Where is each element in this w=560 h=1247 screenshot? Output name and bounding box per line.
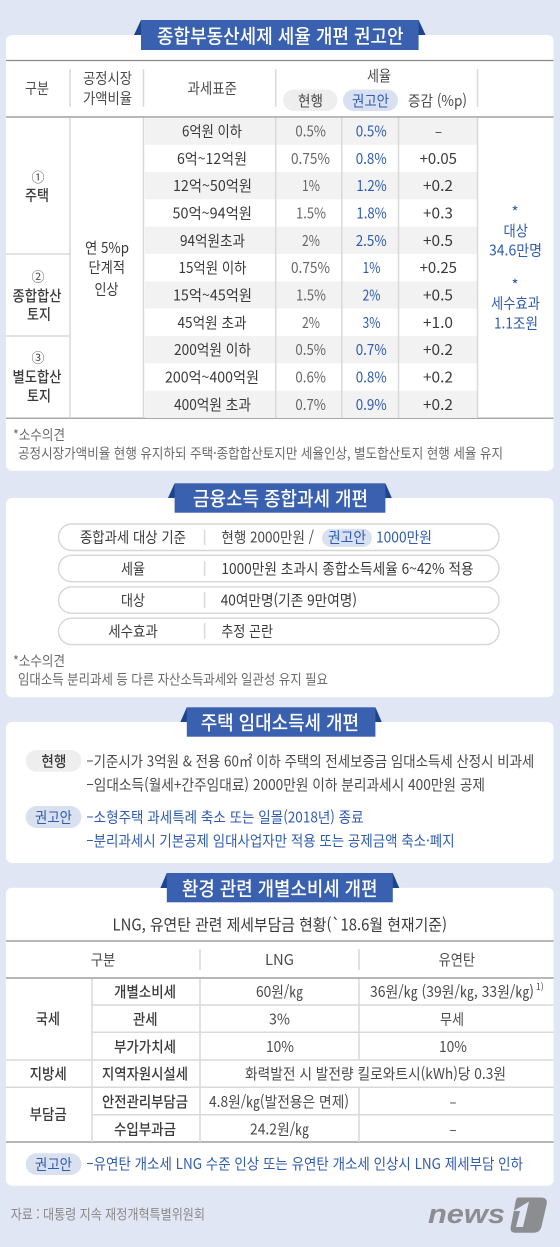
- row: up to 1.5 billion: 0.75%: [291, 257, 330, 278]
- row: over 40 billion: 0.9%: [356, 394, 387, 415]
- row: 20 to 40 billion: 0.8%: [356, 366, 387, 388]
- heading banner: rental income: 주택 임대소득세 개편: [201, 707, 359, 736]
- row: excise tax: [114, 980, 544, 1002]
- row: customs duty: 3%: [269, 1008, 290, 1030]
- category: housing: 주택: [25, 184, 49, 206]
- row: value added tax: 10%: [266, 1036, 294, 1057]
- row: up to 600 million: 0.5%: [356, 120, 387, 142]
- row: up to 1.5 billion: 1%: [362, 257, 381, 278]
- row: excise tax: 개별소비세: [114, 981, 176, 1002]
- category: aggregate land: ②: [32, 266, 45, 286]
- minority opinion note: [13, 425, 503, 463]
- row: import levy: –: [450, 1118, 456, 1140]
- row: tax threshold: 종합과세 대상 기준: [80, 526, 186, 548]
- row: over 9.4 billion: [180, 230, 453, 251]
- row: over 40 billion: +0.2: [423, 394, 453, 415]
- heading banner: financial income: 금융소득 종합과세 개편: [193, 482, 368, 512]
- row: over 9.4 billion: 94억원초과: [180, 230, 245, 251]
- row: up to 20 billion: 0.5%: [295, 339, 326, 360]
- row: value added tax: 10%: [439, 1036, 467, 1057]
- table header: 구분: [25, 78, 49, 98]
- current rules: –임대소득(월세+간주임대료) 2000만원 이하 분리과세시 400만원 공제: [86, 774, 485, 795]
- assessment ratio note: 인상: [94, 278, 119, 300]
- row: up to 20 billion: 0.7%: [356, 339, 387, 360]
- row: 20 to 40 billion: 0.6%: [295, 366, 326, 388]
- assessment ratio note: [85, 237, 129, 300]
- row: excise tax: 60원/㎏: [256, 981, 303, 1002]
- table header: 가액비율: [83, 88, 132, 108]
- row: local tax: [30, 1063, 506, 1084]
- minority opinion note: *소수의견: [13, 651, 65, 671]
- row: over 4.5 billion: 2%: [302, 312, 320, 333]
- row: value added tax: [114, 1036, 467, 1057]
- row: 600 million to 1.2 billion: 0.75%: [291, 148, 330, 169]
- panel: property tax rate reform: [6, 20, 554, 471]
- row: 1.5 to 4.5 billion: +0.5: [423, 284, 453, 306]
- group: national tax: 국세: [36, 1008, 60, 1029]
- row: up to 1.5 billion: 15억원 이하: [178, 257, 247, 278]
- row: up to 600 million: –: [435, 120, 442, 142]
- row: revenue effect: 세수효과: [108, 620, 158, 642]
- table header: 세율: [367, 65, 391, 86]
- row: tax threshold: 1000만원: [376, 526, 432, 548]
- row: 1.5 to 4.5 billion: 1.5%: [296, 284, 326, 306]
- callout: target and revenue effect: 1.1조원: [494, 312, 538, 334]
- current rules: [26, 750, 534, 795]
- recommendation: 권고안: [35, 1153, 72, 1174]
- row: rate: [58, 555, 499, 582]
- row: up to 20 billion: +0.2: [423, 339, 453, 360]
- recommended rules: –소형주택 과세특례 축소 또는 일몰(2018년) 종료: [86, 806, 364, 828]
- minority opinion note: 공정시장가액비율 현행 유지하되 주택·종합합산토지만 세율인상, 별도합산토지 현행 세율 유지: [18, 443, 503, 463]
- callout: target and revenue effect: [489, 202, 542, 334]
- category: aggregate land: 종합합산: [12, 285, 62, 306]
- row: target: [58, 587, 499, 613]
- row: 600 million to 1.2 billion: 0.8%: [356, 148, 387, 169]
- assessment ratio note: 단계적: [88, 256, 125, 278]
- row: customs duty: 관세: [133, 1008, 158, 1030]
- row: 5 to 9.4 billion: 1.8%: [356, 202, 387, 224]
- minority opinion note: 임대소득 분리과세 등 다른 자산소득과세와 일관성 유지 필요: [18, 669, 328, 689]
- callout: target and revenue effect: *: [512, 202, 519, 222]
- row: excise tax: 36원/㎏ (39원/㎏, 33원/㎏): [370, 981, 534, 1002]
- row: 1.2 to 5 billion: 1.2%: [356, 175, 387, 196]
- row: safety management levy: 안전관리부담금: [102, 1091, 188, 1112]
- row: over 4.5 billion: [178, 312, 453, 333]
- row: over 9.4 billion: 2.5%: [356, 230, 387, 251]
- category: separate land: ③: [32, 348, 45, 366]
- row: 600 million to 1.2 billion: +0.05: [420, 148, 457, 169]
- callout: target and revenue effect: *: [512, 274, 519, 296]
- row: excise tax: 1): [536, 980, 544, 993]
- row: 5 to 9.4 billion: [172, 202, 453, 224]
- group: levies: 부담금: [30, 1104, 67, 1124]
- table header: [25, 65, 467, 111]
- row: safety management levy: [102, 1091, 456, 1112]
- row: import levy: 24.2원/㎏: [250, 1118, 309, 1140]
- row: up to 1.5 billion: [178, 257, 457, 278]
- recommended rules: –분리과세시 기본공제 임대사업자만 적용 또는 공제금액 축소·폐지: [86, 830, 455, 851]
- row: 1.5 to 4.5 billion: 15억~45억원: [173, 284, 252, 306]
- row: target: 대상: [121, 590, 145, 610]
- current rules: 현행: [41, 750, 66, 772]
- row: rate: 1000만원 초과시 종합소득세율 6~42% 적용: [221, 558, 474, 579]
- row: tax threshold: [58, 524, 499, 550]
- row: safety management levy: –: [450, 1091, 456, 1112]
- table header: LNG: [265, 949, 294, 970]
- row: customs duty: [133, 1008, 464, 1030]
- table header: 유연탄: [439, 949, 475, 970]
- row: up to 600 million: [182, 120, 442, 142]
- row: local tax: 화력발전 시 발전량 킬로와트시(kWh)당 0.3원: [245, 1063, 506, 1084]
- row: up to 1.5 billion: +0.25: [420, 257, 457, 278]
- row: up to 20 billion: 200억원 이하: [174, 339, 251, 360]
- row: over 9.4 billion: 2%: [302, 230, 320, 251]
- row: import levy: 수입부과금: [114, 1118, 176, 1140]
- category: separate land: 토지: [27, 385, 51, 406]
- recommended rules: [26, 806, 455, 851]
- row: rate: 세율: [121, 558, 145, 579]
- row: over 40 billion: 400억원 초과: [174, 394, 251, 415]
- row: 1.5 to 4.5 billion: [173, 284, 453, 306]
- row: 20 to 40 billion: [165, 366, 453, 388]
- row: 20 to 40 billion: +0.2: [423, 366, 453, 388]
- recommendation: –유연탄 개소세 LNG 수준 인상 또는 유연탄 개소세 인상시 LNG 제세부담 인하: [86, 1153, 523, 1174]
- row: over 4.5 billion: +1.0: [423, 312, 453, 333]
- row: value added tax: 부가가치세: [114, 1036, 176, 1057]
- row: tax threshold: 권고안: [328, 526, 366, 548]
- row: safety management levy: 4.8원/㎏(발전용은 면제): [209, 1091, 349, 1112]
- category: housing: [25, 167, 49, 206]
- recommended rules: 권고안: [35, 806, 72, 828]
- row: 1.2 to 5 billion: +0.2: [423, 175, 453, 196]
- row: 5 to 9.4 billion: 1.5%: [296, 202, 326, 224]
- heading banner: excise tax: 환경 관련 개별소비세 개편: [182, 873, 378, 902]
- minority opinion note: *소수의견: [13, 425, 65, 445]
- row: up to 600 million: 6억원 이하: [182, 120, 242, 142]
- assessment ratio note: 연 5%p: [85, 237, 129, 258]
- table header: 구분: [91, 949, 116, 970]
- row: 600 million to 1.2 billion: [177, 148, 457, 169]
- logo: news1: [428, 1198, 547, 1233]
- row: tax threshold: 현행 2000만원 /: [221, 526, 314, 548]
- row: 1.2 to 5 billion: 1%: [302, 175, 320, 196]
- row: over 4.5 billion: 3%: [362, 312, 381, 333]
- row: over 9.4 billion: +0.5: [423, 230, 453, 251]
- row: import levy: [114, 1118, 456, 1140]
- row: over 40 billion: [174, 394, 453, 415]
- source: 자료 : 대통령 지속 재정개혁특별위원회: [11, 1204, 205, 1224]
- row: up to 600 million: 0.5%: [295, 120, 326, 142]
- table header: 증감 (%p): [408, 90, 467, 111]
- row: over 40 billion: 0.7%: [295, 394, 326, 415]
- row: 5 to 9.4 billion: 50억~94억원: [172, 202, 252, 224]
- row: 1.5 to 4.5 billion: 2%: [362, 284, 381, 306]
- row: 600 million to 1.2 billion: 6억~12억원: [177, 148, 247, 169]
- category: separate land: [12, 348, 62, 406]
- row: over 4.5 billion: 45억원 초과: [178, 312, 247, 333]
- row: local tax: 지역자원시설세: [102, 1063, 188, 1084]
- row: 5 to 9.4 billion: +0.3: [423, 202, 453, 224]
- table header: 권고안: [352, 90, 389, 111]
- table header: 과세표준: [188, 78, 237, 98]
- callout: target and revenue effect: 대상: [504, 220, 528, 241]
- minority opinion note: [13, 651, 328, 689]
- category: housing: ①: [32, 167, 45, 186]
- row: up to 20 billion: [174, 339, 453, 360]
- panel: financial income tax reform: [6, 482, 554, 697]
- row: revenue effect: 추정 곤란: [221, 620, 273, 642]
- table header: [91, 949, 475, 970]
- callout: target and revenue effect: 34.6만명: [489, 240, 542, 260]
- category: aggregate land: 토지: [27, 304, 51, 324]
- panel: environment-related excise tax reform: [6, 873, 554, 1186]
- logo: news1: news: [428, 1199, 505, 1229]
- callout: target and revenue effect: 세수효과: [491, 292, 540, 314]
- row: customs duty: 무세: [440, 1008, 464, 1030]
- category: aggregate land: [12, 266, 62, 324]
- row: target: 40여만명(기존 9만여명): [221, 590, 357, 610]
- row: 1.2 to 5 billion: 12억~50억원: [173, 175, 252, 196]
- table header: 현행: [298, 90, 323, 111]
- table subtitle: LNG, 유연탄 관련 제세부담금 현황(`18.6월 현재기준): [112, 911, 447, 935]
- row: 1.2 to 5 billion: [173, 175, 453, 196]
- panel: housing rental income tax reform: [6, 707, 554, 863]
- row: local tax: 지방세: [30, 1063, 67, 1084]
- row: 20 to 40 billion: 200억~400억원: [165, 366, 259, 388]
- category: separate land: 별도합산: [12, 366, 62, 387]
- row: revenue effect: [58, 618, 499, 645]
- heading banner: property tax: 종합부동산세제 세율 개편 권고안: [157, 20, 404, 49]
- table header: 공정시장: [83, 68, 132, 88]
